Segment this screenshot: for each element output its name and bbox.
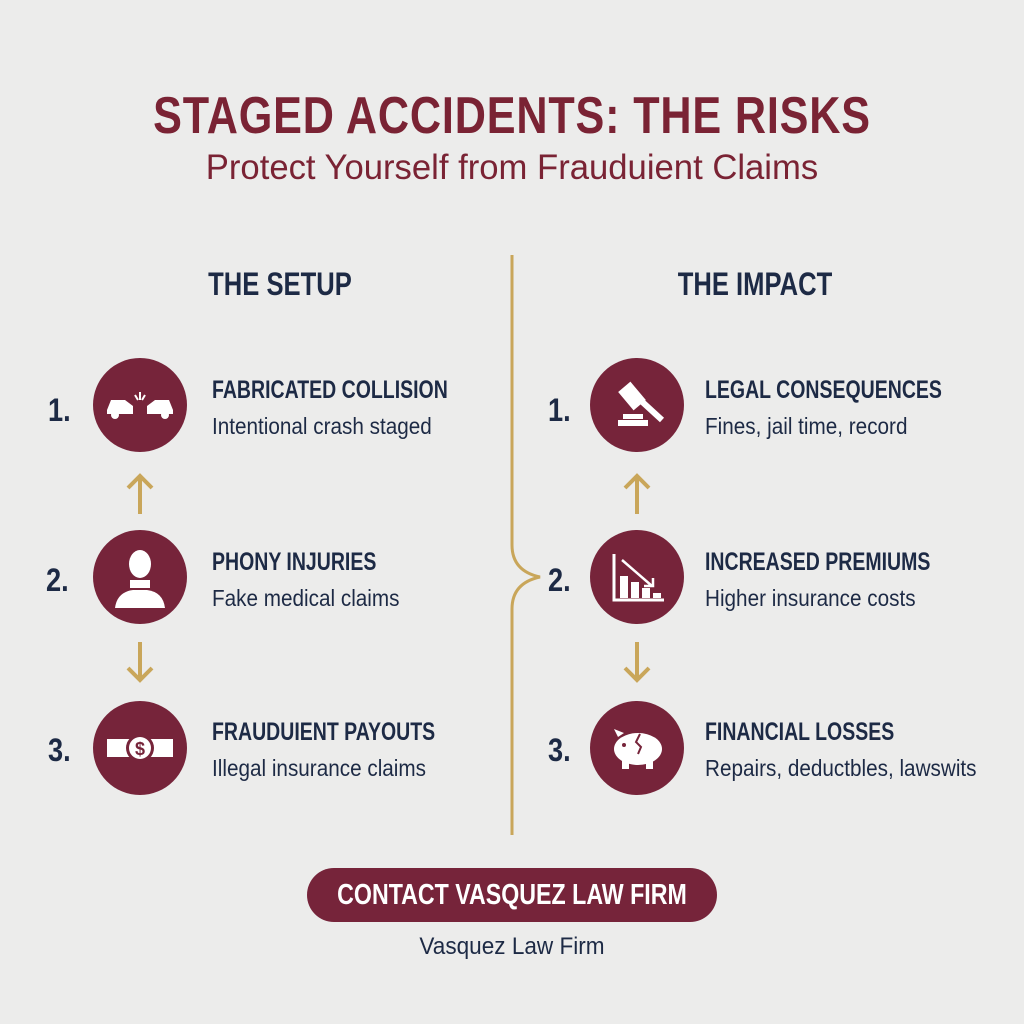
item: fraudulent payouts: FRAUDUIENT PAYOUTS [212, 718, 435, 746]
button: contact [307, 868, 717, 922]
item: phony injuries [212, 548, 400, 611]
panel: setup [46, 358, 448, 795]
icon: gavel [590, 358, 684, 452]
item: financial losses: Repairs, deductbles, lawswits [705, 755, 977, 781]
title: STAGED ACCIDENTS: THE RISKS [153, 87, 871, 145]
icon: chart [590, 530, 684, 624]
arrow up [624, 473, 650, 514]
icon: car collision [93, 358, 187, 452]
number 2: 2. [46, 562, 69, 598]
icon: money [93, 701, 187, 795]
icon: money: $ [135, 739, 145, 759]
panel: impact [548, 358, 977, 795]
item: phony injuries: PHONY INJURIES [212, 548, 376, 576]
number 1: 1. [48, 392, 71, 428]
arrow down [624, 642, 650, 683]
icon: broken piggy bank [590, 701, 684, 795]
arrow down [126, 642, 154, 683]
item: increased premiums: Higher insurance costs [705, 585, 916, 611]
divider with brace [510, 255, 540, 835]
arrow up [126, 473, 154, 514]
item: fraudulent payouts: Illegal insurance claims [212, 755, 426, 781]
number 3: 3. [48, 732, 71, 768]
item: fabricated collision [212, 376, 448, 439]
button: contact: CONTACT VASQUEZ LAW FIRM [337, 879, 687, 911]
item: fabricated collision: Intentional crash staged [212, 413, 432, 439]
item: phony injuries: Fake medical claims [212, 585, 400, 611]
icon: injured person [93, 530, 187, 624]
footer text: Vasquez Law Firm [419, 933, 605, 960]
item: increased premiums: INCREASED PREMIUMS [705, 548, 930, 576]
item: financial losses [705, 718, 977, 781]
item: fabricated collision: FABRICATED COLLISION [212, 376, 448, 404]
number 3: 3. [548, 732, 571, 768]
item: fraudulent payouts [212, 718, 435, 781]
subtitle: Protect Yourself from Frauduient Claims [206, 148, 818, 187]
number 2: 2. [548, 562, 571, 598]
heading: the setup: THE SETUP [208, 266, 352, 302]
item: increased premiums [705, 548, 930, 611]
heading: the impact: THE IMPACT [678, 266, 832, 302]
item: financial losses: FINANCIAL LOSSES [705, 718, 894, 746]
item: legal consequences: Fines, jail time, record [705, 413, 907, 439]
item: legal consequences [705, 376, 942, 439]
number 1: 1. [548, 392, 571, 428]
item: legal consequences: LEGAL CONSEQUENCES [705, 376, 942, 404]
